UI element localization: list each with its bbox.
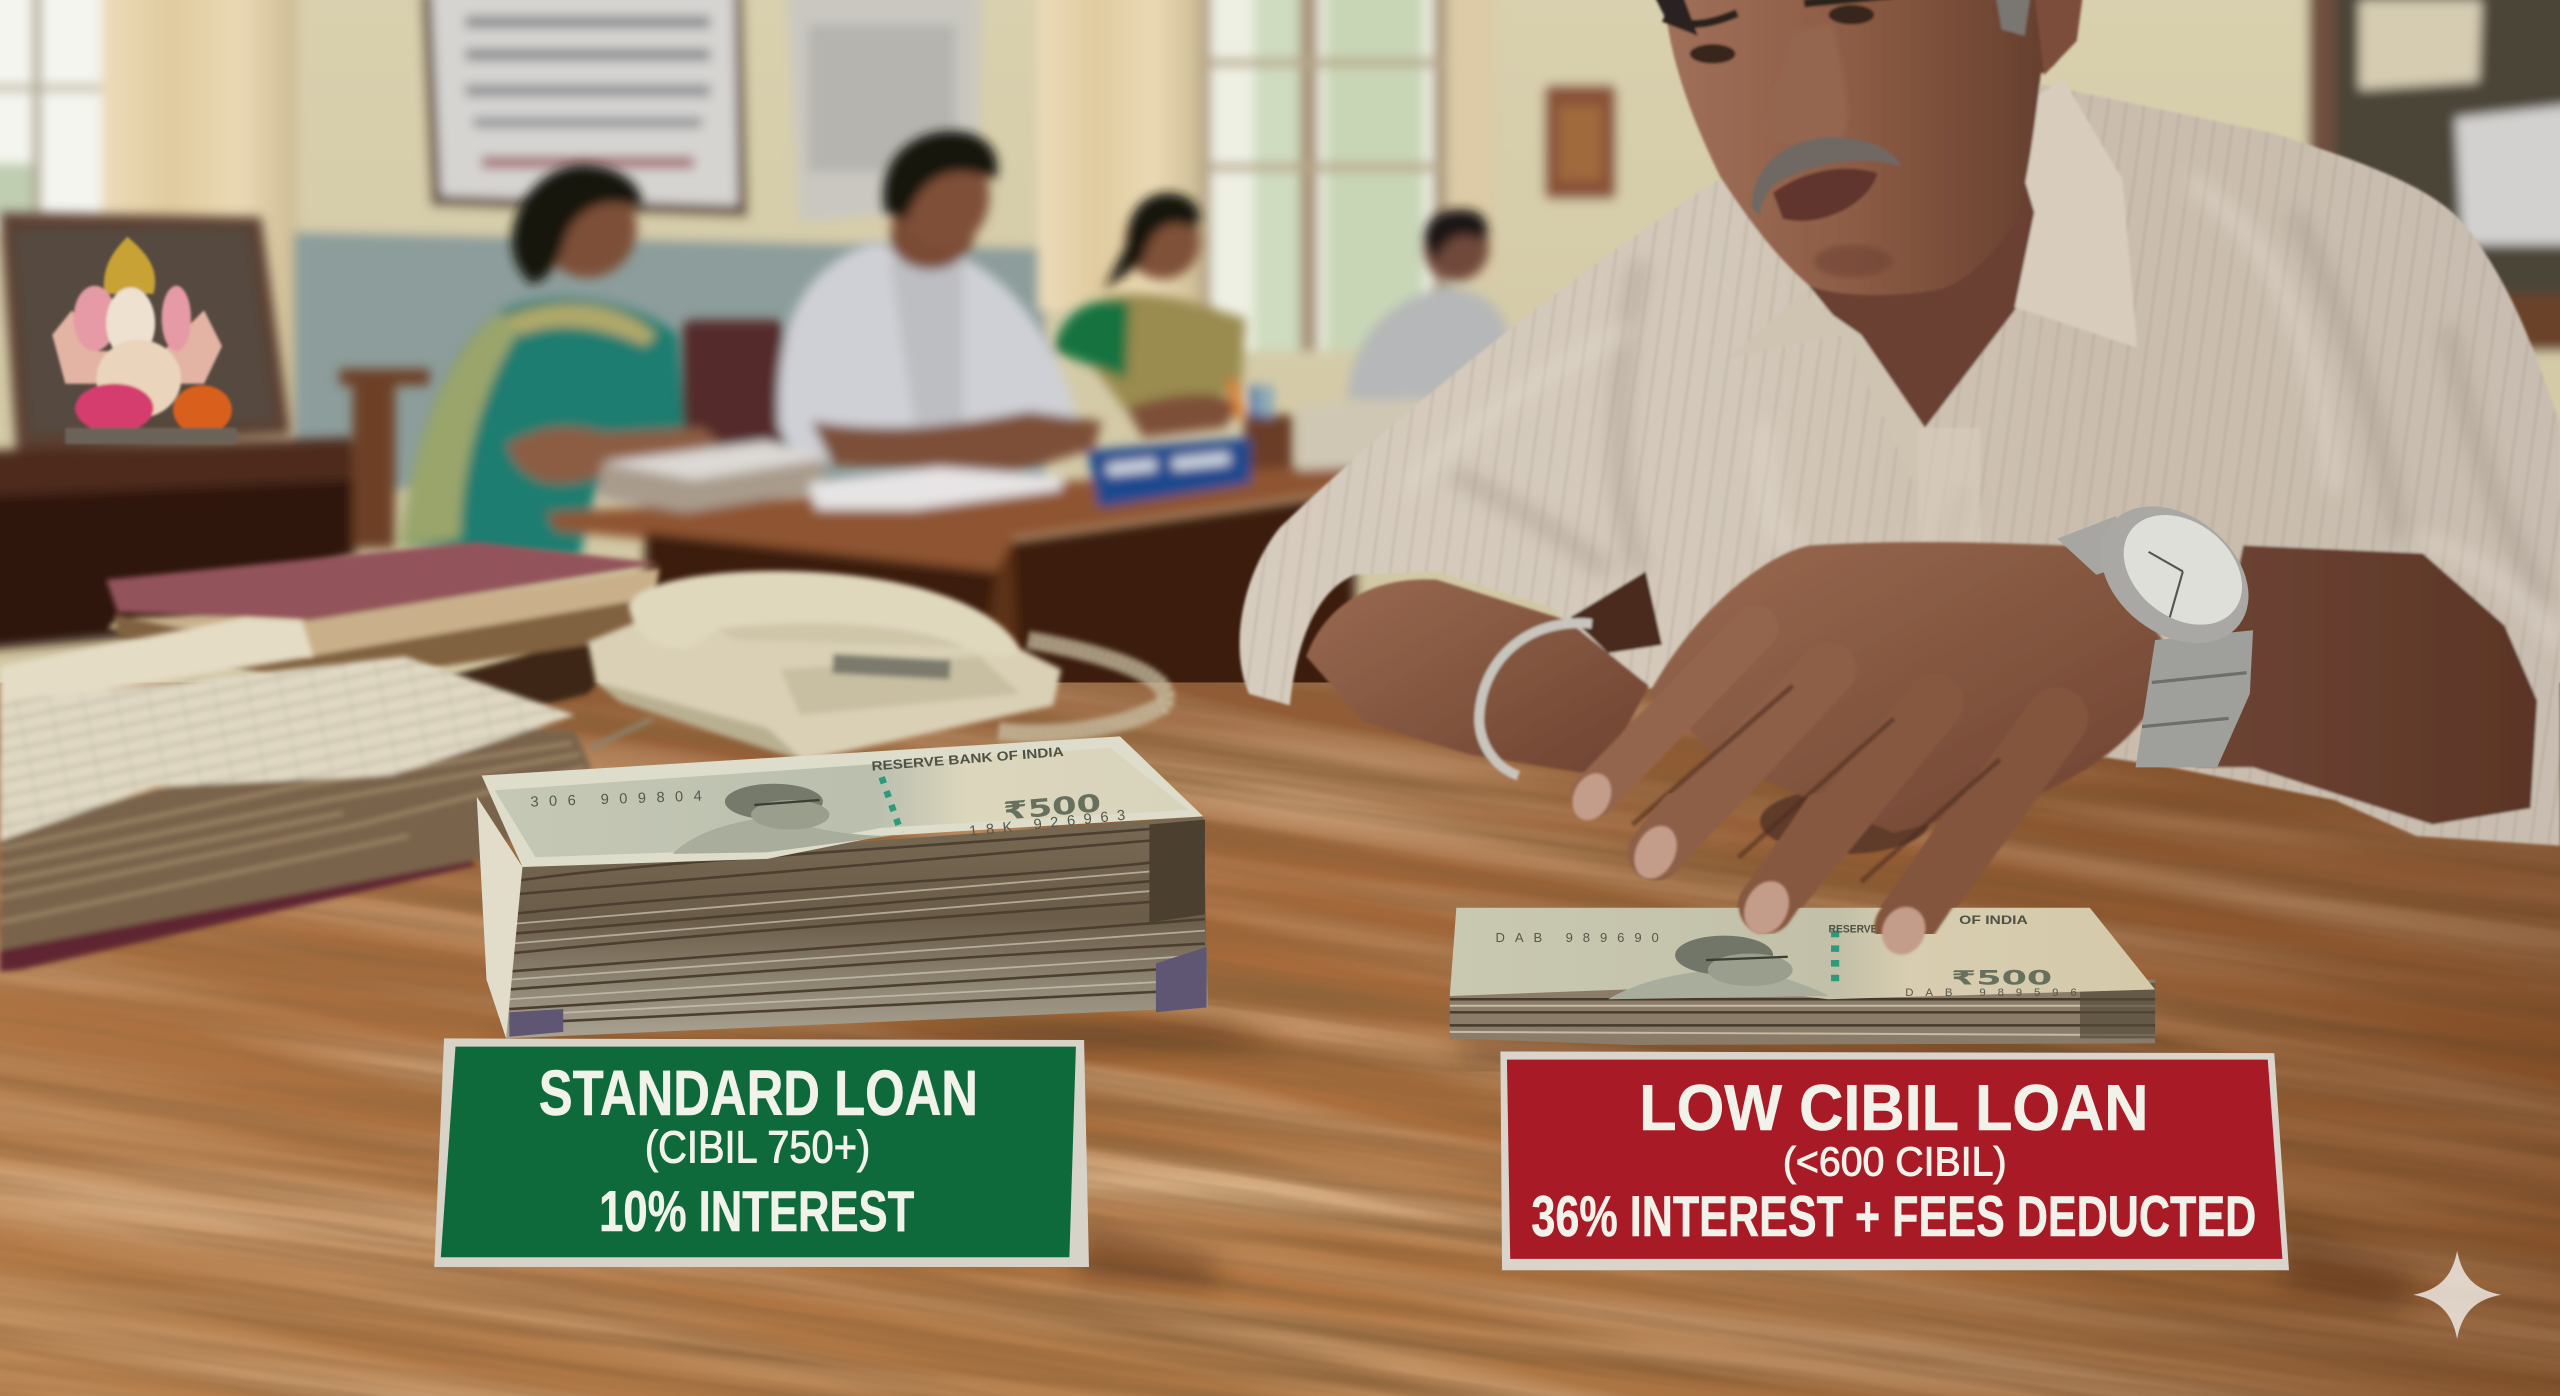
man in white shirt: [778, 131, 1102, 473]
small stack of rupee notes: [1450, 908, 2155, 1045]
shirt torso and sleeves: [1240, 78, 2560, 846]
mouth: [1773, 169, 1878, 221]
telephone cord: [999, 640, 1166, 733]
nose: [1766, 24, 1847, 144]
ear: [2034, 0, 2083, 75]
left forearm: [1306, 579, 1649, 776]
maroon chair back: [682, 320, 784, 447]
watch strap top: [2057, 516, 2132, 575]
small cash stack shadow: [1453, 1042, 2204, 1065]
background desks and staff: [0, 131, 1512, 694]
fingernails: [1565, 767, 1618, 827]
teal wall dado: [294, 232, 1045, 490]
framed notice left: [421, 0, 748, 217]
stacked files: [601, 441, 824, 513]
fingertip nails: [1626, 819, 1933, 962]
file stacks right: [1298, 398, 1420, 470]
sign frame: [434, 1038, 1089, 1267]
hair: [1652, 0, 1698, 36]
left desk: [0, 438, 356, 650]
wristwatch: [2057, 478, 2275, 767]
note text: bank name: RESERVE BANK OF INDIA: [871, 744, 1065, 774]
sleeve folds highlight: [1404, 180, 2560, 645]
knuckle gaps: [1633, 686, 2000, 882]
neck: [1809, 163, 2064, 428]
red sign: low CIBIL loan: [1500, 1051, 2289, 1270]
sign score: (CIBIL 750+): [645, 1122, 870, 1173]
gap between arm and torso: [1571, 571, 1662, 653]
watch case: [2074, 478, 2275, 671]
beige telephone: [588, 571, 1166, 761]
note text: bank name: OF INDIA: [1959, 913, 2028, 927]
wooden table surface: [0, 682, 2560, 1396]
loose papers: [808, 467, 1061, 509]
large cash stack shadow: [490, 1020, 1290, 1078]
right forearm: [2196, 545, 2537, 825]
top rupee note: [482, 736, 1203, 867]
Gandhi portrait: [673, 784, 890, 854]
green sign shadow: [1078, 1216, 1216, 1290]
woman in green sari: [1053, 193, 1246, 438]
note text: serial bottom: 18K 926963: [969, 808, 1126, 840]
framed notice centre: [787, 0, 981, 222]
fingers: [1593, 629, 2057, 927]
sign score: (<600 CIBIL): [1783, 1139, 2007, 1185]
open ledger with page stack: [0, 617, 591, 971]
chair: [340, 369, 429, 549]
moustache: [1752, 137, 1902, 216]
red ledger book: [106, 542, 661, 718]
centre desk: [547, 464, 1355, 694]
note text: serial bottom: DAB 989596: [1905, 987, 2077, 999]
red sign shadow: [2282, 1225, 2416, 1314]
note text: denomination: ₹500: [1002, 788, 1102, 826]
man in grey shirt: [1347, 209, 1512, 400]
hand with fingers: [1565, 542, 2171, 927]
eyebrows: [1664, 0, 1894, 24]
notice board right: [2309, 0, 2560, 351]
pen holder: [1226, 378, 1293, 473]
watch dial: [2102, 492, 2263, 647]
fingers over small notes: [1656, 800, 1967, 927]
watch band: [2136, 630, 2253, 767]
note text: denomination: ₹500: [1951, 967, 2052, 990]
Ganesha idol: [52, 237, 237, 444]
sign heading: STANDARD LOAN: [539, 1058, 978, 1129]
left window: [0, 0, 114, 229]
stacked note edges: [477, 797, 1208, 1038]
collar left: [1729, 294, 1925, 490]
note text: reserve: RESERVE: [1829, 923, 1878, 935]
note security strip: [1833, 931, 1838, 989]
woman in teal sari: [400, 165, 722, 558]
sign face: [1507, 1060, 2282, 1259]
Gandhi portrait: [1608, 936, 1829, 999]
sleeve folds shadow: [1453, 212, 2547, 620]
blue name plate: [1087, 438, 1251, 508]
note security strip: [882, 777, 901, 833]
large stack of rupee notes: [477, 736, 1208, 1038]
bracelet: [1479, 623, 1592, 776]
note text: serial top: 306 909804: [530, 789, 702, 811]
note text: serial top: DAB 989690: [1496, 930, 1659, 945]
background office wall and windows: [0, 0, 2560, 767]
sparkle watermark: [2413, 1251, 2501, 1339]
centre curtain and window: [1038, 0, 1496, 351]
Ganesha frame: [0, 212, 291, 451]
sign rate: 10% INTEREST: [599, 1180, 914, 1244]
back of hand: [1649, 542, 2171, 833]
stacked note edges: [1450, 980, 2155, 1045]
man: shirt, head, arm: [1240, 0, 2560, 846]
eyes: [1690, 44, 1736, 64]
sign face: [441, 1047, 1076, 1257]
sign frame: [1500, 1051, 2289, 1270]
collar right: [2005, 80, 2137, 348]
left curtain: [101, 0, 297, 433]
wall shrine ornament: [1544, 85, 1616, 199]
sign rate and fees: 36% INTEREST + FEES DEDUCTED: [1531, 1185, 2256, 1249]
thumb shadow: [1760, 789, 1930, 854]
top rupee note: [1450, 908, 2155, 999]
head: [1652, 0, 2083, 295]
sign heading: LOW CIBIL LOAN: [1639, 1071, 2149, 1144]
telephone cable: [591, 718, 653, 748]
green sign: standard loan: [434, 1038, 1089, 1267]
placket: [1918, 428, 1980, 575]
